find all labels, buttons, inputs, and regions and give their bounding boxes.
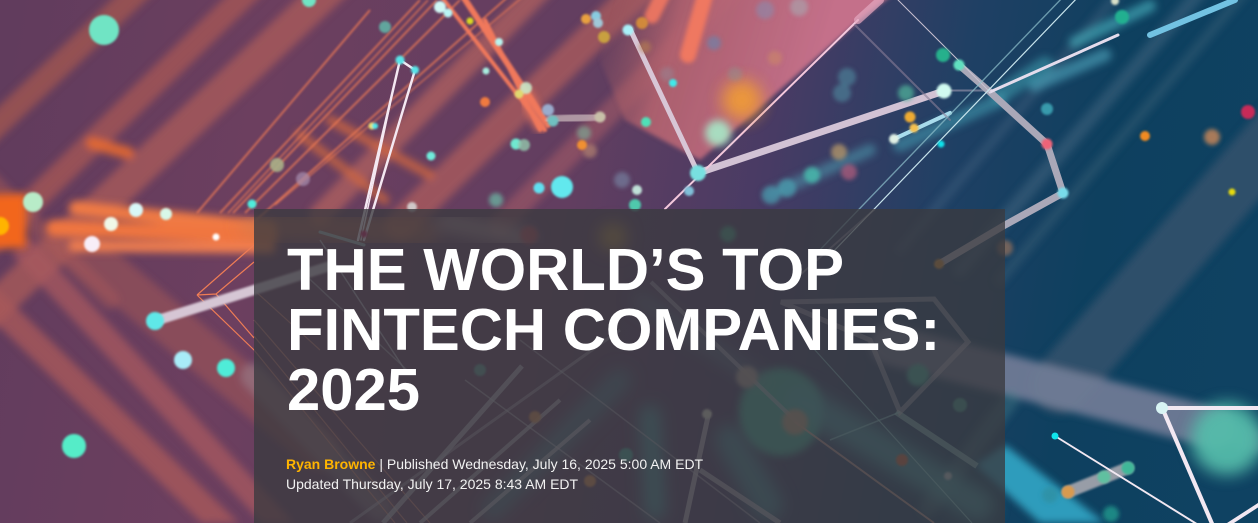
title: THE WORLD’S TOP FINTECH COMPANIES: 2025 [287, 236, 940, 423]
title panel [254, 209, 1005, 523]
byline and dates: Ryan Browne | Published Wednesday, July 16, 2025 5:00 AM EDT [286, 456, 703, 472]
wire frame near left edge of panel [197, 245, 430, 523]
glows behind the panel [492, 223, 978, 510]
orange flare and streaks [0, 0, 706, 248]
lines running behind the panel [300, 209, 977, 523]
pink glow band with crisp right edge [600, 0, 892, 160]
byline and dates [286, 456, 703, 492]
white triangle and diagonal line, lower right [1052, 402, 1258, 523]
warm glow at the top of the panel [254, 222, 525, 238]
byline and dates: Updated Thursday, July 17, 2025 8:43 AM EDT [286, 476, 578, 492]
